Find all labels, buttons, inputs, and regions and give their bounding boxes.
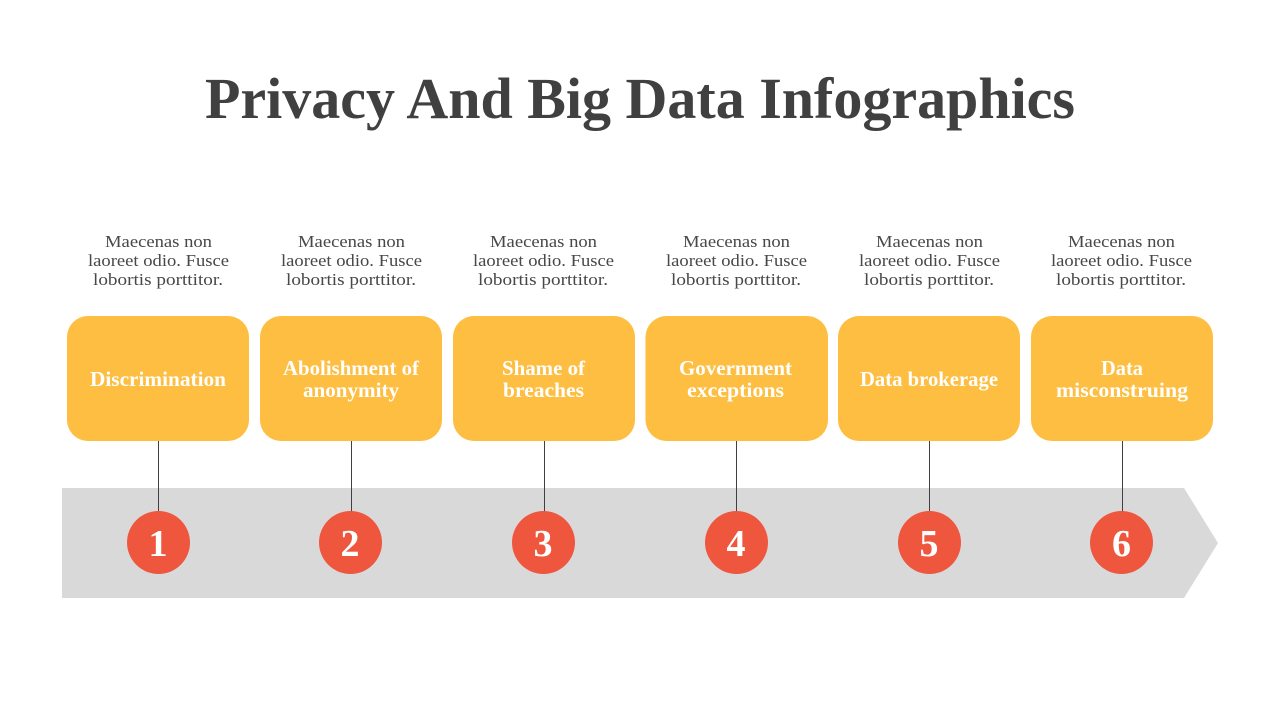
column 6	[1031, 232, 1213, 574]
description 1: Maecenas non	[105, 232, 213, 251]
card label 6	[1056, 356, 1189, 402]
card label 3	[502, 356, 586, 402]
number badge 4	[705, 511, 768, 574]
description 1	[88, 232, 229, 289]
connector 2	[350, 441, 352, 512]
description 4: Maecenas non	[683, 232, 791, 251]
connector 1	[158, 441, 160, 512]
description 5: laoreet odio. Fusce	[859, 251, 1000, 270]
number badge 4: 4	[726, 523, 746, 565]
connector 4	[736, 441, 738, 512]
column 3	[453, 232, 635, 574]
number badge 1	[127, 511, 190, 574]
card label 6: Data	[1101, 356, 1143, 380]
card 3	[453, 316, 635, 441]
card 6	[1031, 316, 1213, 441]
card label 3: breaches	[503, 378, 584, 402]
description 6: laoreet odio. Fusce	[1051, 251, 1192, 270]
card label 2	[283, 356, 420, 402]
description 1: lobortis porttitor.	[93, 270, 223, 289]
connector 6	[1122, 441, 1124, 512]
card label 3: Shame of	[502, 356, 586, 380]
number badge 5	[898, 511, 961, 574]
description 3: lobortis porttitor.	[478, 270, 608, 289]
column 5	[838, 232, 1020, 574]
number badge 5: 5	[920, 523, 938, 565]
description 5	[859, 232, 1000, 289]
description 6	[1051, 232, 1192, 289]
column 2	[260, 232, 442, 574]
card label 5: Data brokerage	[860, 367, 998, 391]
card label 1: Discrimination	[90, 367, 226, 391]
description 2: Maecenas non	[298, 232, 406, 251]
description 5: lobortis porttitor.	[864, 270, 994, 289]
description 4	[666, 232, 807, 289]
card label 2: Abolishment of	[283, 356, 420, 380]
card label 4	[679, 356, 792, 402]
number badge 6	[1090, 511, 1153, 574]
card label 4: exceptions	[687, 378, 784, 402]
column 4	[646, 232, 828, 574]
card 1	[67, 316, 249, 441]
description 3: laoreet odio. Fusce	[473, 251, 614, 270]
card label 4: Government	[679, 356, 792, 380]
number badge 3	[512, 511, 575, 574]
description 2: laoreet odio. Fusce	[281, 251, 422, 270]
description 2	[281, 232, 422, 289]
description 1: laoreet odio. Fusce	[88, 251, 229, 270]
description 5: Maecenas non	[876, 232, 984, 251]
connector 5	[928, 441, 930, 512]
description 3: Maecenas non	[490, 232, 598, 251]
arrow band	[62, 488, 1218, 598]
column 1	[67, 232, 249, 574]
number badge 3: 3	[534, 523, 552, 565]
card 5	[838, 316, 1020, 441]
card label 2: anonymity	[303, 378, 399, 402]
description 6: lobortis porttitor.	[1056, 270, 1186, 289]
description 3	[473, 232, 614, 289]
card label 6: misconstruing	[1056, 378, 1189, 402]
description 2: lobortis porttitor.	[286, 270, 416, 289]
number badge 1: 1	[148, 523, 168, 565]
number badge 2: 2	[340, 523, 360, 565]
card 4	[646, 316, 828, 441]
card 2	[260, 316, 442, 441]
connector 3	[544, 441, 546, 512]
description 6: Maecenas non	[1068, 232, 1176, 251]
number badge 6: 6	[1112, 523, 1131, 565]
description 4: laoreet odio. Fusce	[666, 251, 807, 270]
title: Privacy And Big Data Infographics	[205, 66, 1075, 131]
number badge 2	[319, 511, 382, 574]
description 4: lobortis porttitor.	[671, 270, 801, 289]
